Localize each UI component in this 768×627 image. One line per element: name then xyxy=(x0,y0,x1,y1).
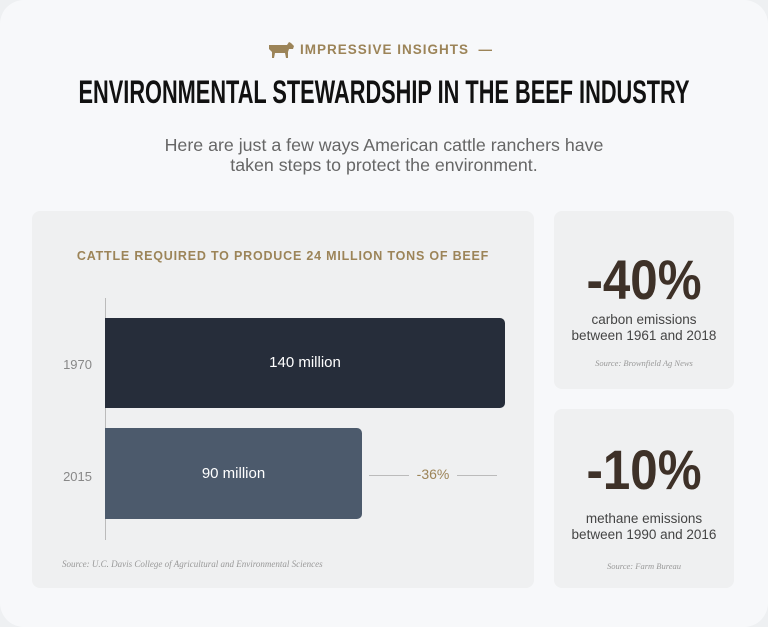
subtitle: taken steps to protect the environment. xyxy=(230,155,538,175)
bar 1970: 140 million xyxy=(269,354,341,371)
bar 1970 xyxy=(63,318,505,408)
bar 2015 xyxy=(63,428,497,519)
source: Source: U.C. Davis College of Agricultural and Environmental Sciences xyxy=(62,559,323,569)
icon: cow xyxy=(269,42,294,58)
bar 2015: 2015 xyxy=(63,469,92,484)
bar 1970: 1970 xyxy=(63,357,92,372)
panel: carbon: -40% xyxy=(586,248,702,311)
bar 2015: 90 million xyxy=(202,465,265,482)
panel: methane xyxy=(554,409,734,588)
subtitle: Here are just a few ways American cattle ranchers have xyxy=(165,135,603,155)
panel: carbon: Source: Brownfield Ag News xyxy=(595,358,693,368)
panel: methane: Source: Farm Bureau xyxy=(607,561,681,571)
panel: methane: methane emissions xyxy=(586,511,702,526)
panel: bar chart xyxy=(32,211,534,588)
callout -36%: -36% xyxy=(417,466,449,482)
panel: methane: -10% xyxy=(586,438,702,501)
chart title: CATTLE REQUIRED TO PRODUCE 24 MILLION TONS OF BEEF xyxy=(77,249,489,263)
title: ENVIRONMENTAL STEWARDSHIP IN THE BEEF INDUSTRY xyxy=(79,74,689,110)
panel: carbon xyxy=(554,211,734,389)
panel: carbon: carbon emissions xyxy=(591,312,697,327)
panel: methane: between 1990 and 2016 xyxy=(572,527,716,542)
kicker: IMPRESSIVE INSIGHTS — xyxy=(300,42,493,57)
panel: carbon: between 1961 and 2018 xyxy=(572,328,716,343)
subtitle xyxy=(165,135,603,175)
